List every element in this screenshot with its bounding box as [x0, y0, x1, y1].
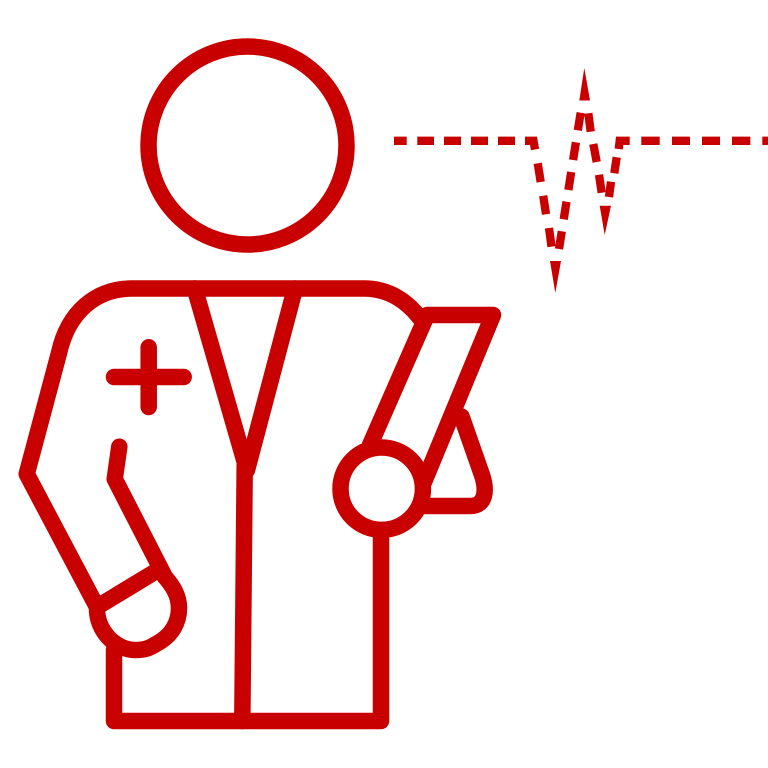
heartbeat dashed line	[394, 113, 768, 249]
head	[148, 46, 346, 244]
clipboard lower page	[425, 416, 485, 506]
right hand	[340, 448, 423, 530]
left hand	[97, 570, 179, 650]
doctor figure	[27, 46, 493, 721]
collar	[195, 288, 295, 470]
medical cross	[114, 347, 184, 407]
clipboard	[370, 315, 493, 482]
coat body and left arm outline	[27, 288, 420, 721]
heartbeat spikes	[550, 68, 611, 293]
centre seam	[242, 466, 245, 721]
inner sleeve line	[115, 447, 165, 577]
